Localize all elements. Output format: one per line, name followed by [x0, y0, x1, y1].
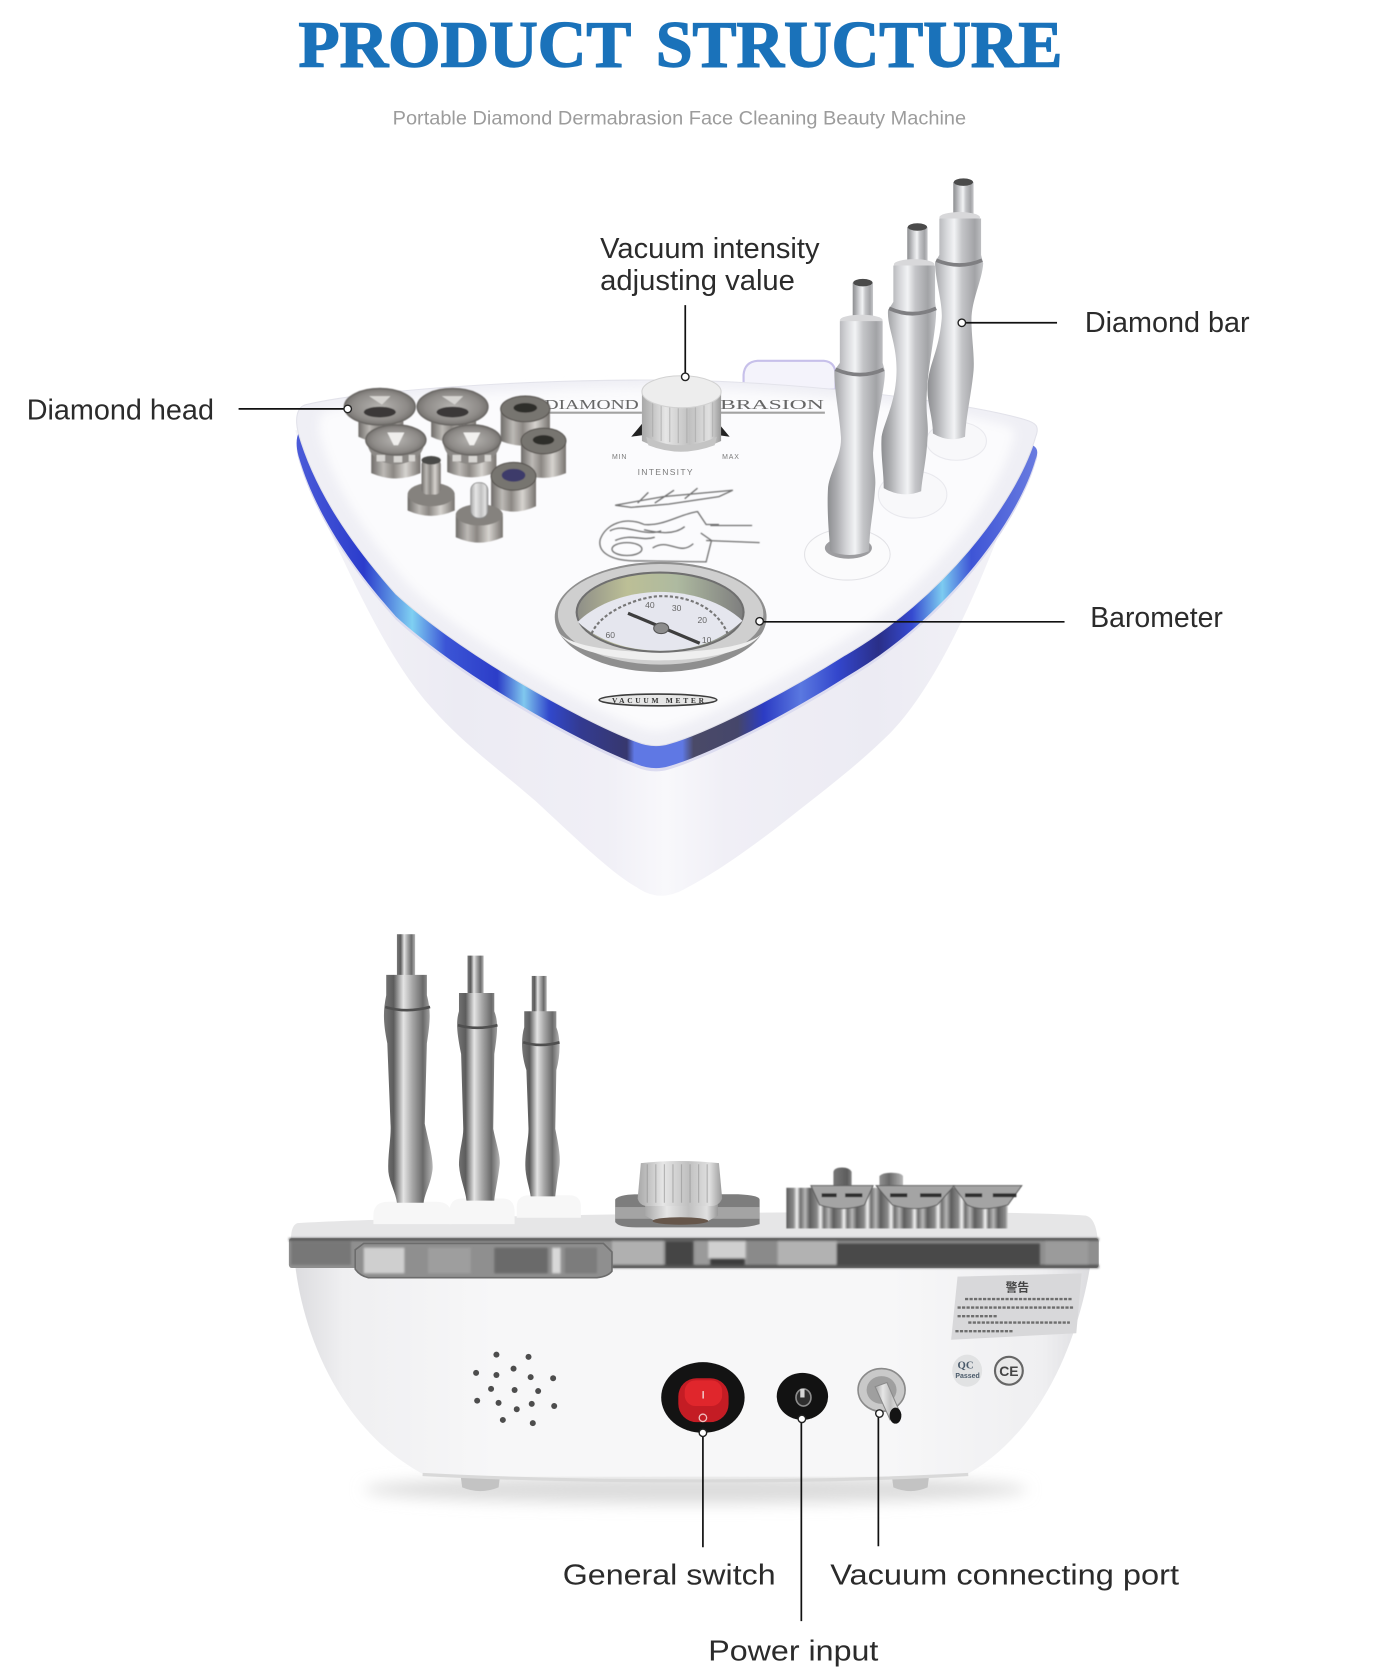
top plate — [291, 1212, 1098, 1239]
barometer: 40 — [645, 600, 655, 610]
transparent band — [289, 1238, 1099, 1268]
title — [298, 10, 1062, 82]
callout: vacuum intensity — [600, 233, 820, 381]
callout: general switch — [563, 1429, 776, 1592]
ground shadow — [364, 1476, 1027, 1503]
front bar — [805, 279, 890, 580]
vacuum meter badge — [599, 694, 717, 706]
barometer: 10 — [702, 635, 712, 645]
panel text: diamond dermabrasion: DIAMOND — [545, 398, 639, 413]
callout: power input: Power input — [708, 1636, 878, 1668]
vacuum meter badge: VACUUM METER — [612, 696, 705, 705]
side knob — [615, 1161, 760, 1227]
barometer: 20 — [698, 615, 707, 625]
handle tab — [355, 1243, 612, 1278]
callout: general switch: General switch — [563, 1560, 776, 1592]
medium heads — [366, 425, 426, 478]
title: PRODUCT — [298, 10, 631, 82]
body shell — [295, 1266, 1090, 1477]
callout: diamond head: Diamond head — [27, 395, 214, 427]
bar A — [384, 934, 433, 1203]
top view device — [295, 178, 1037, 896]
intensity knob: MAX — [722, 454, 740, 461]
handle behind device — [744, 361, 836, 390]
certification badges: QC — [958, 1360, 974, 1372]
top surface — [297, 380, 1037, 746]
power switch — [661, 1362, 745, 1433]
side diamond heads — [786, 1167, 1022, 1228]
callout: diamond bar — [958, 307, 1250, 339]
vacuum port — [858, 1369, 905, 1424]
callout: vacuum intensity: Vacuum intensity — [600, 233, 820, 265]
bar holders — [373, 1195, 581, 1224]
callout: barometer — [756, 602, 1223, 634]
barometer: 60 — [606, 630, 615, 640]
rear bar — [927, 178, 986, 460]
panel text: diamond dermabrasion — [535, 398, 825, 413]
face line art — [600, 488, 760, 562]
nozzle head left — [408, 456, 455, 516]
middle bar — [878, 223, 947, 518]
panel text: diamond dermabrasion: BRASION — [720, 398, 824, 413]
cylinder head right — [521, 428, 566, 478]
power input socket — [777, 1373, 828, 1420]
standing bars — [373, 934, 581, 1224]
nozzle tips — [833, 1167, 903, 1186]
title: STRUCTURE — [656, 10, 1062, 82]
callout: vacuum connecting port — [830, 1410, 1179, 1592]
barometer: 30 — [672, 603, 682, 613]
diamond bar holders and bars — [805, 178, 986, 580]
diamond heads — [344, 389, 566, 543]
callout: barometer: Barometer — [1090, 602, 1223, 634]
feet — [460, 1471, 930, 1491]
bar B — [457, 956, 500, 1201]
callout: diamond bar: Diamond bar — [1085, 307, 1250, 339]
warning label — [951, 1273, 1082, 1340]
large head rear — [344, 389, 415, 442]
subtitle: Portable Diamond Dermabrasion Face Cleaning Beauty Machine — [393, 108, 966, 129]
nozzle head front — [456, 483, 503, 543]
blue light band — [297, 402, 1037, 771]
callout: power input — [708, 1415, 878, 1668]
flared head tops — [811, 1186, 873, 1209]
cylinder head blue — [491, 462, 536, 512]
intensity knob: INTENSITY — [638, 467, 694, 477]
speaker holes — [473, 1352, 557, 1426]
device body — [295, 407, 1036, 896]
certification badges: Passed — [955, 1373, 980, 1380]
cylinder head rear right — [501, 396, 550, 446]
callout: vacuum connecting port: Vacuum connecting port — [830, 1560, 1179, 1592]
surface inner bevel — [319, 387, 1015, 731]
side view device — [289, 934, 1099, 1503]
certification badges: CE — [999, 1363, 1019, 1379]
callout: vacuum intensity: adjusting value — [600, 265, 795, 297]
warning label: 警告 — [1006, 1279, 1029, 1296]
bar C — [522, 976, 560, 1196]
callout: diamond head — [27, 395, 351, 427]
intensity knob — [612, 376, 740, 477]
intensity knob: MIN — [612, 454, 627, 461]
certification badges — [952, 1355, 1023, 1387]
barometer — [555, 562, 767, 672]
